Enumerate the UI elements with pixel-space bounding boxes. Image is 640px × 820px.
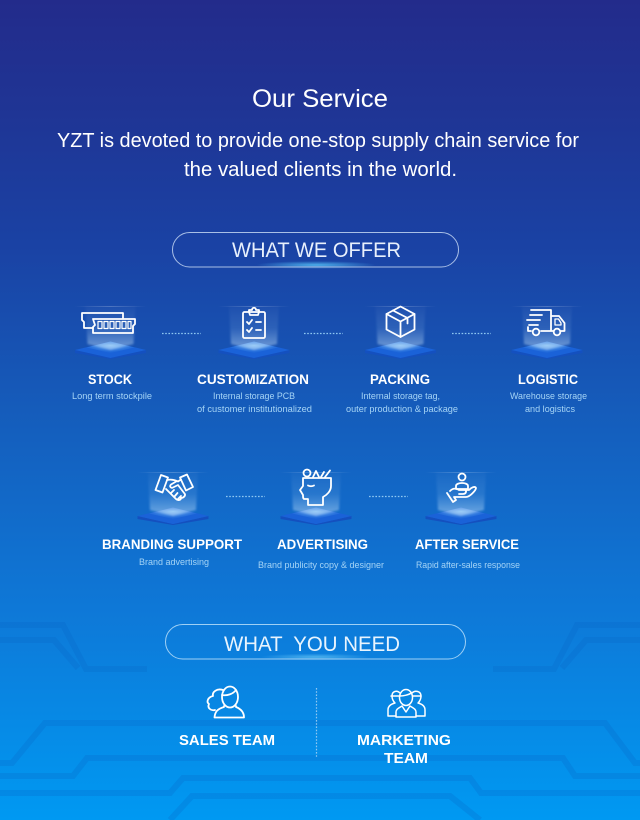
service: branding support: BRANDING SUPPORT <box>102 537 243 552</box>
service: customization: of customer institutionalized <box>197 404 312 415</box>
intro text <box>57 130 579 181</box>
service: after service: AFTER SERVICE <box>415 537 519 552</box>
intro text: YZT is devoted to provide one-stop supply chain service for <box>57 130 579 152</box>
intro text: the valued clients in the world. <box>184 159 457 181</box>
team: marketing <box>357 690 451 767</box>
service: logistic <box>510 306 587 415</box>
heading pill: what you need <box>166 624 466 660</box>
service: logistic: and logistics <box>525 404 575 415</box>
team: marketing: MARKETING <box>357 733 451 749</box>
icon: head with ideas <box>300 470 331 505</box>
heading pill: what we offer <box>172 232 458 269</box>
icon: group of people <box>388 690 425 717</box>
service: stock: STOCK <box>88 372 132 387</box>
icon: hand holding person <box>447 474 476 502</box>
service: advertising <box>258 470 384 571</box>
team: marketing: TEAM <box>384 751 428 767</box>
icon: delivery truck <box>527 310 564 335</box>
service: packing: Internal storage tag, <box>361 391 440 402</box>
service: customization <box>197 306 312 415</box>
service: logistic: Warehouse storage <box>510 391 587 402</box>
service: customization: CUSTOMIZATION <box>197 372 309 387</box>
service: customization: Internal storage PCB <box>213 391 295 402</box>
service: branding support <box>102 472 243 568</box>
connector <box>304 332 343 334</box>
service: advertising: ADVERTISING <box>277 537 368 552</box>
icon: memory modules <box>82 313 135 333</box>
connector <box>369 496 408 498</box>
service: stock <box>72 306 152 402</box>
heading pill: what we offer: WHAT WE OFFER <box>232 239 401 262</box>
service: advertising: Brand publicity copy & designer <box>258 560 384 571</box>
circuit pattern background <box>0 625 640 820</box>
service: after service <box>415 472 520 571</box>
icon: cardboard box <box>386 306 414 337</box>
icon: clipboard checklist <box>243 308 265 338</box>
title: Our Service <box>252 85 388 113</box>
service: packing: PACKING <box>370 372 430 387</box>
connector <box>226 496 265 498</box>
icon: handshake <box>156 474 193 500</box>
connector <box>162 332 201 334</box>
service: stock: Long term stockpile <box>72 391 152 402</box>
heading pill: what you need: WHAT YOU NEED <box>224 633 400 656</box>
divider <box>316 688 318 757</box>
service: packing <box>346 306 458 415</box>
service: packing: outer production & package <box>346 404 458 415</box>
team: sales <box>179 686 275 749</box>
service: after service: Rapid after-sales response <box>416 560 520 571</box>
team: sales: SALES TEAM <box>179 733 275 749</box>
service: branding support: Brand advertising <box>139 557 209 568</box>
service: logistic: LOGISTIC <box>518 372 578 387</box>
icon: sales person <box>208 686 244 718</box>
connector <box>452 332 491 334</box>
